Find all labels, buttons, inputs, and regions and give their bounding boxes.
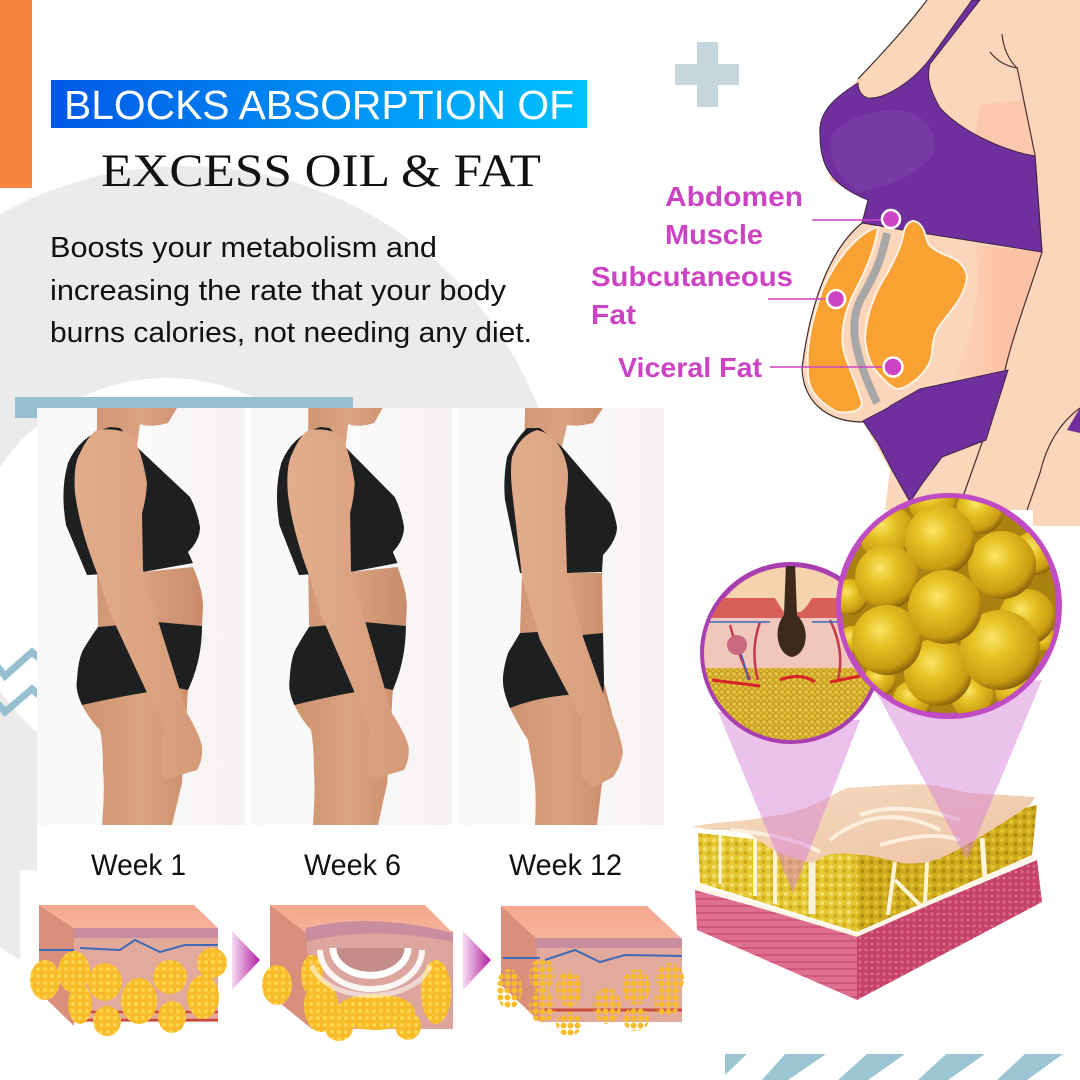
photo: week 6 (251, 408, 452, 825)
week labels: Week 6 (304, 849, 401, 882)
week labels: Week 1 (91, 849, 186, 882)
bra highlight (830, 110, 935, 192)
decorative stripes bottom right (725, 1054, 1063, 1080)
callout: abdomen muscle: Abdomen (665, 181, 803, 212)
arrow: week 1 to week 6 (232, 931, 260, 990)
arrow: week 6 to week 12 (463, 931, 491, 990)
back shading (950, 245, 1042, 385)
week labels: Week 12 (509, 849, 622, 882)
body text (50, 232, 532, 349)
callout: subcutaneous fat (591, 261, 845, 330)
photo backing strip (37, 408, 664, 825)
callout: abdomen muscle (665, 181, 900, 250)
magnified view: skin layers (700, 563, 880, 750)
magnified view: fat cells (832, 475, 1059, 720)
skin cube: week 1 (30, 905, 227, 1036)
subcutaneous fat (808, 227, 878, 412)
skin cube: week 6 (262, 905, 453, 1041)
photo: week 12 (458, 408, 664, 825)
accent bar above photos (15, 397, 353, 418)
illustration: torso with belly cross-section (802, 0, 1080, 526)
arm contour (960, 67, 1042, 505)
chest outline (858, 0, 927, 79)
callout: visceral fat: Viceral Fat (618, 352, 762, 383)
briefs far side (1067, 408, 1080, 433)
torso skin (802, 0, 1080, 526)
callout: abdomen muscle: Muscle (665, 219, 763, 250)
bra (820, 0, 1042, 252)
icon: plus sign (675, 42, 739, 107)
callout: visceral fat (618, 352, 902, 383)
body text: increasing the rate that your body (50, 275, 507, 307)
title banner: BLOCKS ABSORPTION OF (64, 82, 574, 128)
week labels (91, 849, 622, 882)
heading: excess oil and fat: EXCESS OIL & FAT (101, 145, 541, 197)
armpit shading (975, 100, 1035, 155)
decorative gray circle (0, 166, 564, 960)
white band behind labels and cubes (20, 825, 700, 1080)
decorative white circle (0, 378, 368, 780)
leg contour (1027, 408, 1080, 510)
body text: Boosts your metabolism and (50, 232, 437, 264)
orange accent bar (0, 0, 32, 188)
belly outline (802, 223, 863, 422)
shoulder creases (990, 34, 1017, 68)
skin cube: week 12 (496, 906, 684, 1036)
body text: burns calories, not needing any diet. (50, 317, 532, 349)
photo: week 1 (37, 408, 245, 825)
magnifier cones (718, 680, 1042, 893)
muscle band (854, 233, 887, 403)
callout: subcutaneous fat: Subcutaneous (591, 261, 793, 292)
briefs (863, 370, 1008, 502)
zigzag decoration (0, 652, 40, 712)
callout: subcutaneous fat: Fat (591, 299, 636, 330)
skin block with fat layer (692, 784, 1042, 1000)
visceral fat (865, 221, 967, 389)
